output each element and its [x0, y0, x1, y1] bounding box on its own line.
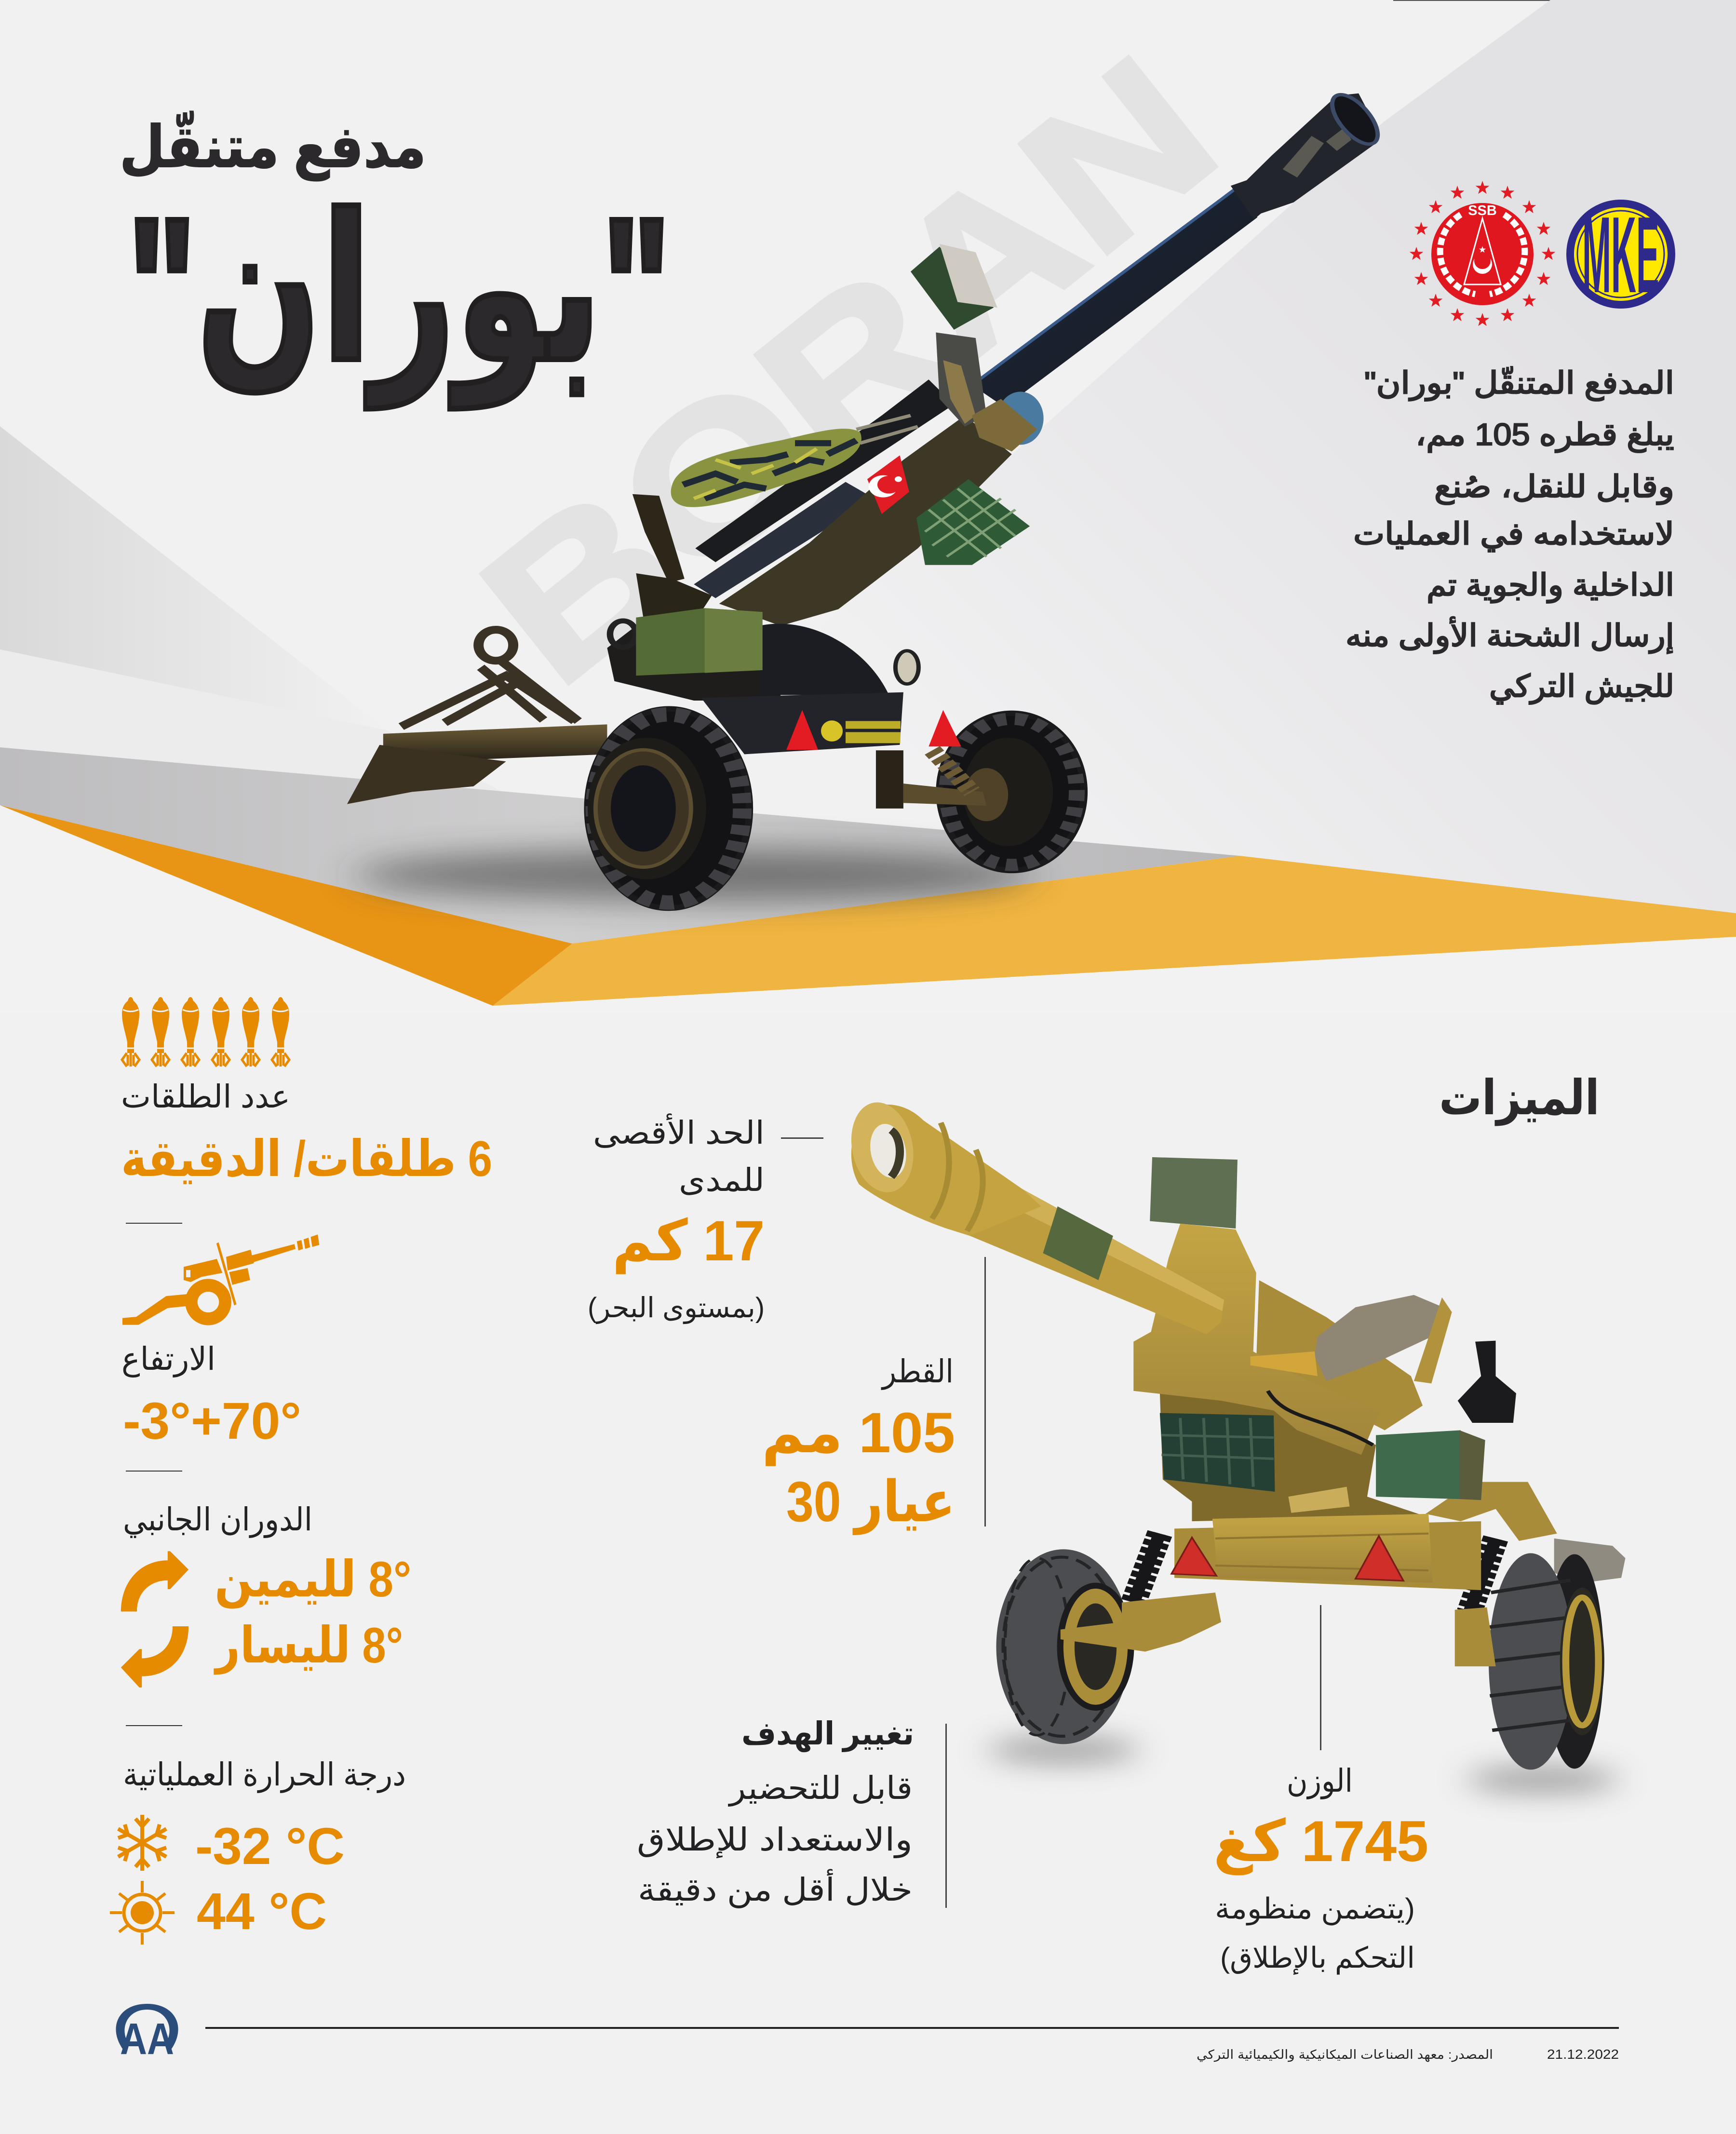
crescent and star: [1473, 246, 1492, 274]
rear arm: [1414, 1297, 1452, 1383]
struts to trunnion: [856, 416, 918, 443]
delta mark: [1464, 218, 1501, 284]
sight box: [911, 244, 997, 330]
value: -3°+70°: [123, 1391, 301, 1450]
top edge line: [1393, 0, 1736, 1]
value: 1745 كغ: [1213, 1809, 1428, 1875]
floor below the facets: [0, 805, 1736, 1013]
icon: sun: [110, 1881, 175, 1945]
callout: calibre: [762, 1257, 986, 1535]
suspension arm: [876, 750, 986, 809]
wheel shadows: [987, 1736, 1618, 1793]
intro paragraph: وقابل للنقل، صُنع: [1434, 469, 1674, 505]
star ring: [1410, 181, 1555, 326]
ladder frame: [401, 630, 578, 727]
callout: target change: [637, 1715, 947, 1908]
title line 2: "بوران": [127, 176, 671, 410]
top howitzer photo illustration: [347, 89, 1387, 908]
stat: elevation: [121, 1234, 319, 1450]
callout: max range: [588, 1113, 823, 1324]
note line 2: التحكم بالإطلاق): [1220, 1942, 1415, 1975]
right wheel: [1489, 1553, 1604, 1769]
footer rule: [205, 2027, 1619, 2029]
MKE emblem: [1566, 194, 1675, 315]
stat: operating temperature: [110, 1756, 406, 1945]
leader line: [945, 1724, 947, 1908]
dark orange floor facet: [0, 805, 572, 1006]
callout: weight: [1213, 1605, 1428, 1975]
green grid basket: [916, 479, 1030, 565]
muzzle brake: [1231, 89, 1387, 219]
bronze strip on column: [943, 360, 976, 424]
value left: ⁦8°⁩ لليسار: [214, 1618, 403, 1675]
wreath: [1440, 215, 1525, 294]
cradle: [719, 416, 1012, 626]
icon: snowflake: [118, 1815, 166, 1871]
watermark BORAN: BORAN: [443, 14, 1254, 726]
background facet: right grey plane: [723, 0, 1736, 940]
logos: [1410, 181, 1675, 326]
recuperator tubes: [694, 379, 954, 598]
grey floor band: [0, 747, 1240, 944]
bottom howitzer photo illustration: [845, 1099, 1626, 1793]
intro paragraph: المدفع المتنقّل "بوران": [1364, 365, 1674, 401]
source: المصدر: معهد الصناعات الميكانيكية والكيميائية التركي: [1197, 2047, 1493, 2062]
sight mount and trunnion: [1133, 1224, 1379, 1455]
body behind basket: [1160, 1391, 1426, 1521]
breech bracket: [636, 573, 712, 618]
green basket: [1160, 1413, 1275, 1492]
icon: howitzer: [122, 1234, 319, 1325]
leader line: [781, 1137, 823, 1139]
background facet: left lower plane: [0, 649, 554, 820]
camouflage cylinder: [671, 429, 861, 507]
breech loop: [610, 621, 636, 648]
green ammo box: [1376, 1430, 1485, 1500]
features heading: الميزات: [1439, 1071, 1600, 1126]
icon: turn arrows: [121, 1551, 188, 1688]
intro paragraph: يبلغ قطره 105 مم،: [1415, 417, 1674, 453]
left support arm: [632, 494, 685, 582]
value: 6 طلقات/ الدقيقة: [121, 1131, 492, 1187]
bronze cup and blue reflection: [972, 392, 1044, 451]
label: القطر: [881, 1353, 954, 1390]
label line 1: الحد الأقصى: [593, 1113, 765, 1150]
barrel: [972, 189, 1257, 407]
intro paragraph: لاستخدامه في العمليات: [1353, 516, 1674, 552]
yellow stencil logo: [821, 720, 901, 743]
label: الدوران الجانبي: [123, 1501, 312, 1538]
body line 1: قابل للتحضير: [728, 1770, 913, 1807]
SSB label: SSB: [1468, 203, 1497, 218]
right axle bracket: [1455, 1607, 1496, 1666]
cable: [1268, 1391, 1373, 1445]
trail end behind: [1554, 1539, 1626, 1583]
red reflector triangles: [1171, 1536, 1403, 1581]
spade: [347, 745, 506, 804]
muzzle brake: [845, 1099, 1041, 1236]
note: (بمستوى البحر): [588, 1292, 765, 1324]
label: درجة الحرارة العملياتية: [123, 1756, 406, 1793]
date: 21.12.2022: [1547, 2047, 1619, 2062]
red disc: [1431, 203, 1534, 305]
left wheel: [996, 1549, 1134, 1744]
intro paragraph: إرسال الشحنة الأولى منه: [1346, 616, 1674, 654]
left axle arm: [1061, 1593, 1221, 1652]
title line 1: مدفع متنقّل: [120, 111, 426, 181]
value 2: عيار 30: [786, 1470, 955, 1535]
ground shadow: [354, 848, 1034, 902]
label: الوزن: [1287, 1763, 1353, 1799]
body line 3: خلال أقل من دقيقة: [638, 1869, 913, 1908]
stat: traverse: [121, 1501, 411, 1688]
label line 2: للمدى: [679, 1162, 765, 1198]
lower cylinder: [1288, 1487, 1350, 1513]
wrapped recuperator: [1315, 1295, 1443, 1381]
icon: six shells: [122, 997, 289, 1067]
stat: rounds per minute: [121, 997, 492, 1187]
background facet: left grey triangle: [0, 426, 388, 730]
sight mount column: [936, 333, 986, 427]
footer: [116, 2004, 1619, 2064]
sight box: [1150, 1157, 1238, 1229]
intro paragraph: الداخلية والجوية تم: [1426, 567, 1674, 603]
trail arm: [383, 724, 607, 763]
note line 1: (يتضمن منظومة: [1215, 1892, 1415, 1926]
heading: تغيير الهدف: [741, 1715, 914, 1753]
carriage arch: [759, 624, 889, 695]
red reflector triangles: [786, 710, 961, 750]
breech mechanism under box: [607, 626, 781, 701]
label: عدد الطلقات: [121, 1079, 290, 1114]
left wheel: [588, 709, 750, 908]
leader line: [1320, 1605, 1321, 1750]
under-carriage: [701, 692, 903, 754]
AA logo: AA: [120, 2014, 174, 2064]
value: 17 كم: [612, 1209, 765, 1274]
intro paragraph: للجيش التركي: [1489, 669, 1674, 704]
carriage beam: [1174, 1514, 1481, 1590]
Turkish flag: [867, 455, 909, 514]
label: الارتفاع: [121, 1341, 215, 1378]
value 1: 105 مم: [762, 1401, 955, 1466]
headlight: [895, 651, 918, 684]
right wheel: [940, 713, 1084, 870]
right frame: [1426, 1482, 1557, 1541]
value hot: 44 °C: [197, 1882, 327, 1940]
value cold: -32 °C: [195, 1817, 345, 1875]
light orange floor facet: [493, 856, 1736, 1006]
body line 2: والاستعداد للإطلاق: [637, 1822, 913, 1858]
rear cradle: [1256, 1280, 1423, 1430]
intro paragraph: [1346, 365, 1674, 704]
black sight: [1458, 1341, 1516, 1423]
trunnion pin: [1251, 1351, 1318, 1376]
leader line: [984, 1257, 986, 1526]
suspension springs: [1133, 1534, 1496, 1612]
barrel: [964, 1189, 1224, 1334]
green ammo box: [636, 608, 763, 675]
value right: ⁦8°⁩ لليمين: [215, 1552, 411, 1608]
SSB emblem: [1410, 181, 1555, 326]
